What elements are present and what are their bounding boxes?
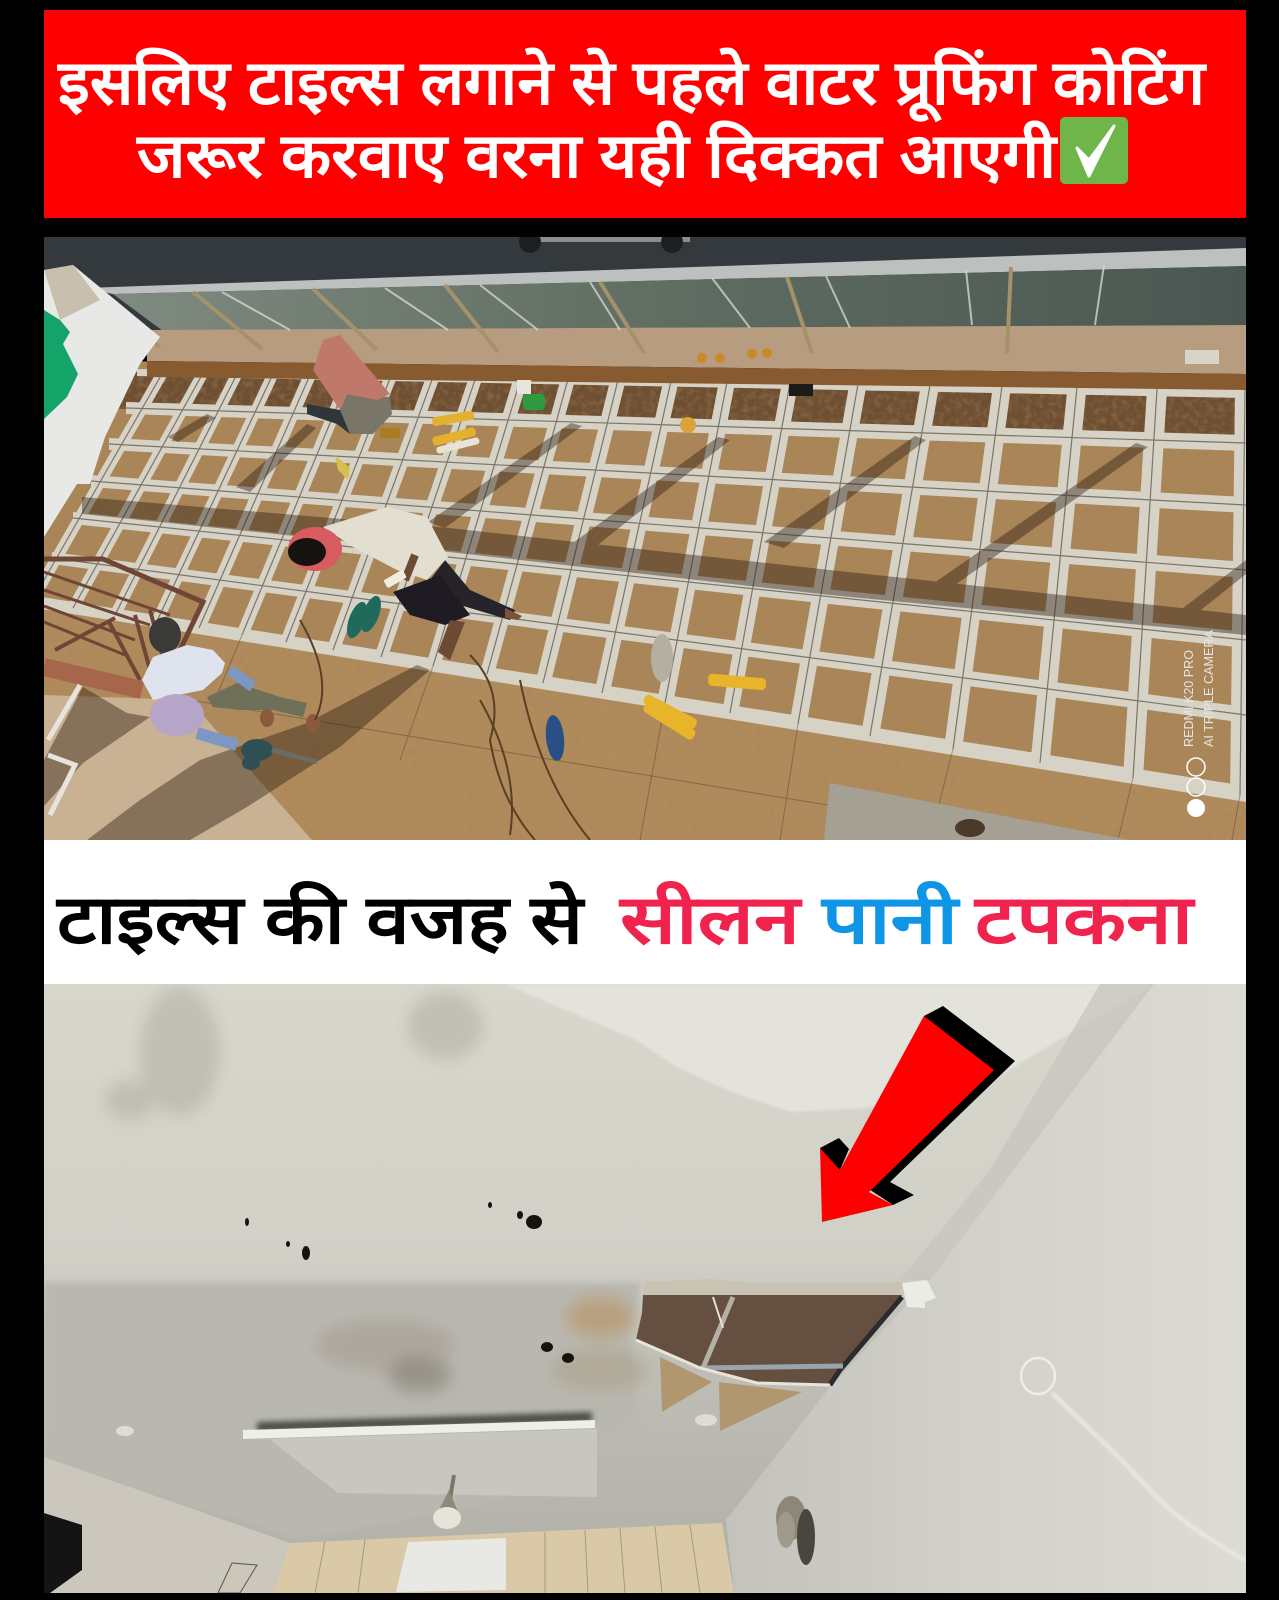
glass railing [113,266,1246,331]
parapet ledge [147,325,1246,374]
white door [396,1538,506,1592]
worker in white shirt [288,507,522,660]
railing shadows on floor [44,414,1246,840]
string lights [222,265,1104,330]
electric wire [300,620,590,840]
items on ledge [697,348,1219,364]
right wall [726,984,1246,1593]
red arrow [820,1006,1015,1222]
torn flap left [660,1357,712,1412]
stair frame [48,685,80,815]
staircase railing [44,559,203,690]
ceiling fan [433,1475,461,1529]
marble slab [824,783,1130,840]
ceiling lights [116,1414,717,1436]
worker with drill [142,645,320,770]
lower plain tiles [29,601,1246,840]
banner panel [44,10,1246,218]
road below the terrace [44,237,1246,330]
green can and paper [517,380,545,410]
panel seams [315,1525,700,1593]
camera watermark: REDMI K20 PRO [1181,650,1196,747]
tile grout columns [32,372,1245,795]
caption black text: टाइल्स की वजह से [55,881,585,958]
parapet brown band [147,361,1246,390]
green tarp [44,310,78,419]
back wall cream panels [273,1523,734,1593]
ceiling hole [636,1295,902,1385]
yellow cloth [335,455,350,480]
yellow roll [680,417,696,433]
hole top strip [643,1279,903,1295]
caption word: water: पानी [820,881,961,958]
bottle [651,634,673,682]
white wall at left [44,265,160,537]
tile grout rows [29,369,1246,802]
torn edge [636,1340,830,1385]
white caption band [44,840,1246,984]
false ceiling panel [269,1429,597,1497]
gray beam edge [900,984,1154,1280]
mould patches [105,985,483,1120]
arrow body [820,1016,994,1222]
photo: damaged ceiling [44,984,1246,1593]
railing posts [77,267,1011,353]
header banner [44,10,1246,218]
terrace floor base [44,362,1234,784]
marble coping [85,248,1246,294]
dark wet spots [245,1202,574,1363]
beige landing tiles [44,695,312,840]
water stains [315,1297,650,1393]
picture frame [218,1563,257,1593]
icon: green check mark [1060,117,1128,184]
clean upper patch [505,984,1154,1112]
tile texture [120,376,1235,434]
torn flap right [719,1382,802,1431]
arrow shadow [820,1006,1015,1205]
slab stain [955,819,985,837]
camera watermark [1181,630,1216,747]
plaster ring [1021,1358,1055,1394]
shaded top tile row [118,372,1235,435]
headline line one: इसलिए टाइल्स लगाने से पहले वाटर प्रूफिंग कोटिंग [57,47,1207,123]
plain tile joints [190,635,1240,840]
ceiling base [44,984,1246,1593]
black box [789,384,813,396]
hanging wire [713,1297,723,1328]
lower ceiling shade [44,1283,640,1540]
green slippers [347,596,381,638]
helmet under stairs [149,617,181,653]
headline line two: जरूर करवाए वरना यही दिक्कत आएगी [136,120,1058,191]
wall lamp [776,1496,815,1565]
hole right frame [830,1297,902,1385]
white bracket [902,1280,936,1308]
plaster crack [1052,1393,1246,1560]
false ceiling shadow [257,1412,592,1432]
false ceiling white edge [243,1420,595,1439]
white pipe in hole [703,1297,733,1368]
watermark dots [1187,758,1205,817]
black object left [44,1513,82,1593]
blue slipper [546,715,564,761]
wall shade [44,265,100,320]
caption word: dripping: टपकना [973,882,1196,958]
yellow glue tubes near first worker [432,410,480,454]
photo: workers on tiled terrace [29,231,1246,840]
worker in red cloth [307,335,400,438]
yellow tubes [642,673,766,741]
parked car [519,237,690,253]
left wall [44,1457,290,1593]
band panel [44,840,1246,984]
caption word: seepage: सीलन [618,881,803,958]
grout joints [32,372,1246,795]
camera watermark: AI TRIPLE CAMERA [1201,630,1216,747]
metal strip [700,1366,843,1368]
